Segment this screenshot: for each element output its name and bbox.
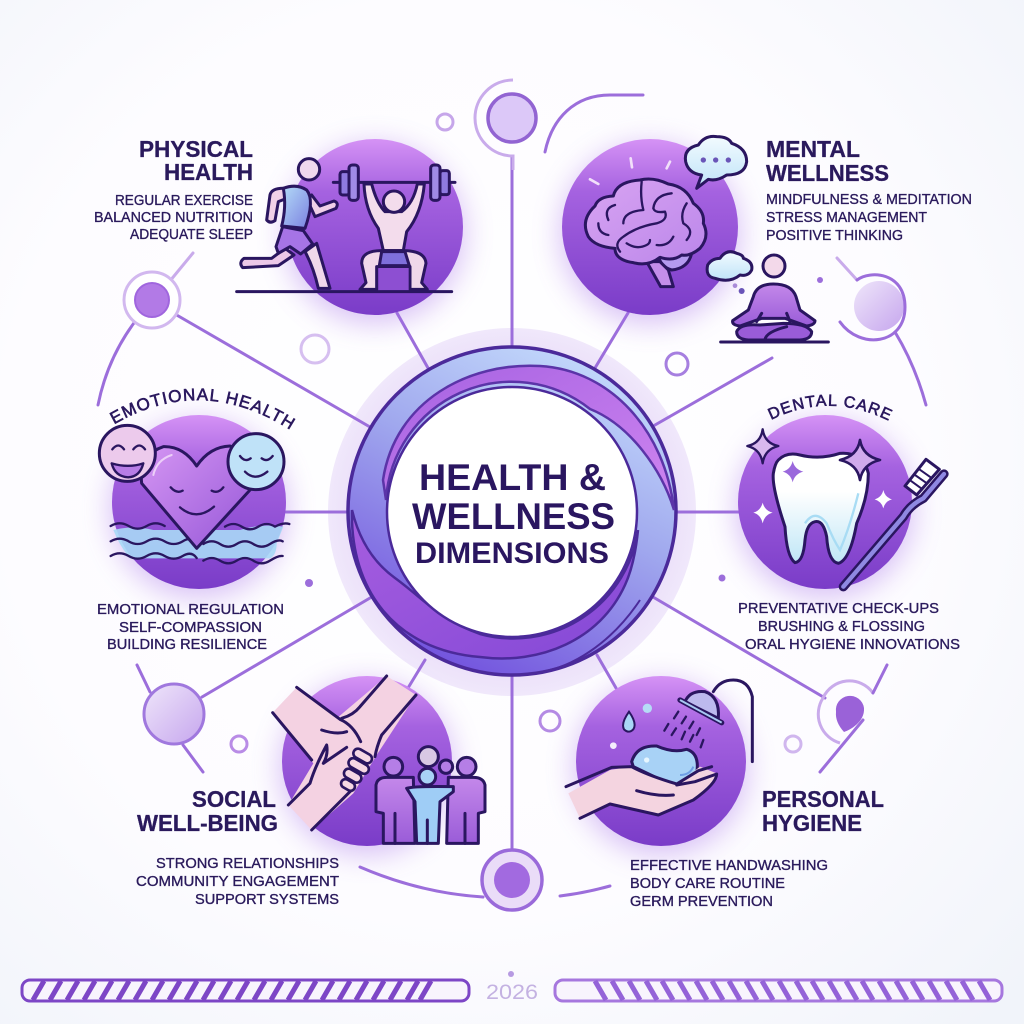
icon: brain, bubbles and meditation (585, 136, 828, 342)
node: upper right circle (840, 275, 905, 340)
heading: emotional health: EMOTIONAL HEALTH (109, 388, 296, 430)
heading: social well-being: SOCIAL (192, 786, 276, 812)
heading: social well-being: WELL-BEING (137, 810, 278, 836)
text: mental items (766, 191, 972, 244)
text: emotional items: EMOTIONAL REGULATION (97, 601, 284, 618)
node: upper left circle (124, 272, 180, 328)
text: physical items (94, 192, 253, 243)
text: hygiene items: GERM PREVENTION (630, 893, 773, 910)
panel: bubble glows (110, 144, 914, 855)
heading: mental wellness: WELLNESS (766, 160, 889, 186)
heading: physical health: PHYSICAL (139, 136, 253, 162)
panel: social well-being (136, 676, 485, 908)
text: dental items: BRUSHING & FLOSSING (758, 618, 925, 635)
text: mental items: STRESS MANAGEMENT (766, 209, 927, 226)
footer: left striped bar (22, 980, 469, 1001)
node: bottom circle (482, 850, 542, 910)
icon: shower, soap and hand (566, 680, 752, 818)
panel: physical health (94, 136, 463, 315)
text: mental items: POSITIVE THINKING (766, 227, 903, 244)
node: top circle (475, 80, 536, 170)
text: emotional items: BUILDING RESILIENCE (107, 636, 267, 653)
footer: year: 2026 (486, 981, 538, 1004)
panel: personal hygiene (566, 676, 884, 910)
icon: heart, faces and waves (99, 425, 289, 563)
title: HEALTH & (419, 457, 606, 498)
panel: mental wellness (562, 136, 972, 342)
central hub halo (328, 328, 696, 696)
heading: personal hygiene: HYGIENE (762, 810, 862, 836)
text: social items: SUPPORT SYSTEMS (195, 891, 339, 908)
text: physical items: ADEQUATE SLEEP (130, 226, 253, 243)
heading: mental wellness: MENTAL (766, 136, 860, 162)
heading: social well-being (137, 786, 278, 836)
heading: physical health: HEALTH (164, 159, 253, 185)
decorative small rings and dots (231, 114, 823, 752)
node: lower left circle (144, 684, 204, 744)
text: social items: STRONG RELATIONSHIPS (156, 855, 339, 872)
central hub (348, 347, 676, 675)
heading: mental wellness (766, 136, 889, 186)
panel: dental care (738, 394, 960, 653)
text: mental items: MINDFULNESS & MEDITATION (766, 191, 972, 208)
heading: dental care: DENTAL CARE (767, 394, 893, 421)
text: physical items: REGULAR EXERCISE (115, 192, 253, 209)
node: lower right circle (818, 665, 887, 772)
text: hygiene items (630, 857, 828, 910)
heading: personal hygiene (762, 786, 884, 836)
connector network (98, 95, 926, 897)
text: dental items: ORAL HYGIENE INNOVATIONS (745, 636, 960, 653)
text: hygiene items: BODY CARE ROUTINE (630, 875, 785, 892)
text: social items (136, 855, 339, 908)
text: dental items (738, 600, 960, 653)
heading: personal hygiene: PERSONAL (762, 786, 884, 812)
heading: physical health (139, 136, 253, 185)
title: WELLNESS (412, 496, 615, 537)
icon: tooth, sparkles and toothbrush (747, 429, 944, 587)
icon: runner and weightlifter (237, 159, 455, 292)
footer: right striped bar (555, 980, 1002, 1001)
title (412, 457, 615, 570)
text: social items: COMMUNITY ENGAGEMENT (136, 873, 339, 890)
title: DIMENSIONS (415, 537, 609, 570)
text: physical items: BALANCED NUTRITION (94, 209, 253, 226)
panel: emotional health (97, 388, 296, 653)
text: emotional items (97, 601, 284, 653)
icon: clasped hands and group of people (273, 676, 485, 843)
footer: year (486, 971, 538, 1004)
text: dental items: PREVENTATIVE CHECK-UPS (738, 600, 939, 617)
text: hygiene items: EFFECTIVE HANDWASHING (630, 857, 828, 874)
text: emotional items: SELF-COMPASSION (119, 619, 262, 636)
